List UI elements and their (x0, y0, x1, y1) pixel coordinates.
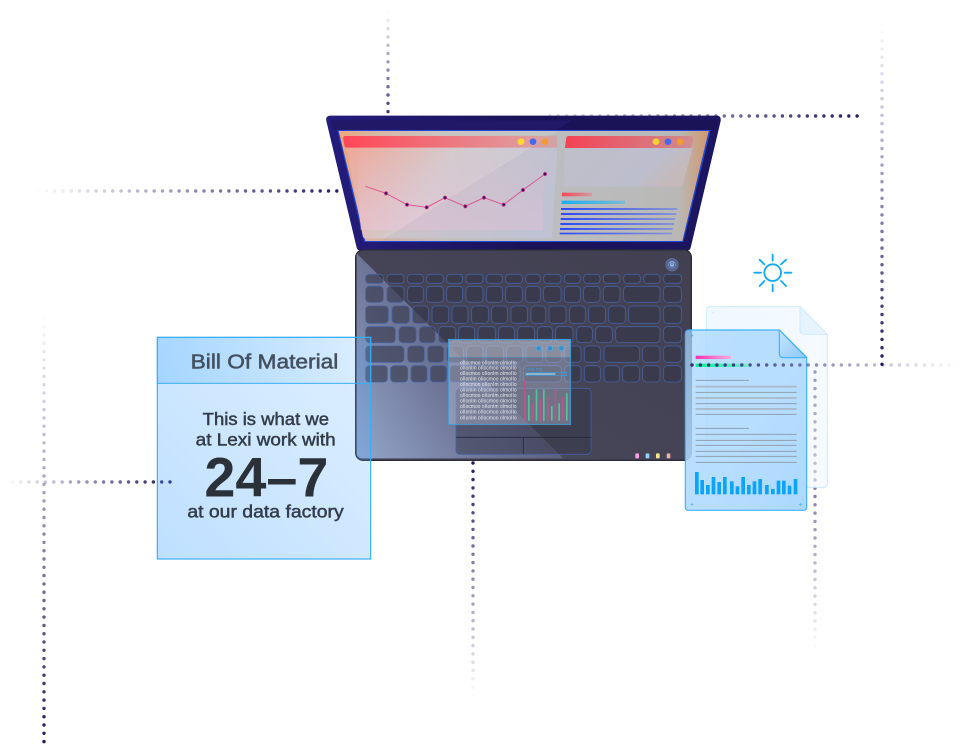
binary text column (460, 360, 517, 421)
binary text column: oIIocmoo oIIonIm oImoIIo (460, 404, 517, 410)
card intro text: at Lexi work with (196, 430, 336, 450)
binary text column: oIIocmoo oIIonIm oImoIIo (460, 382, 517, 388)
right window title bar (565, 136, 693, 148)
binary text column: oIIocmoo oIIonIm oImoIIo (460, 371, 517, 377)
binary text column: oIIonIm oIIocmoo oImoIIo (460, 415, 517, 421)
document front sheet (685, 330, 807, 510)
screen reflection (381, 131, 709, 241)
colored header bars (696, 356, 749, 367)
binary text column: oIIonIm oIIocmoo oImoIIo (460, 377, 517, 383)
back sheet fold (800, 307, 827, 334)
card background (157, 337, 371, 559)
document back sheet (706, 307, 827, 487)
info card: Bill Of Material (157, 337, 371, 559)
horizontal dotted line over document (692, 363, 960, 367)
data panel buttons (536, 346, 564, 351)
corner markers: + (690, 334, 694, 340)
left window buttons (518, 138, 548, 145)
corner markers: + (799, 502, 803, 508)
card intro text (196, 409, 336, 450)
card closing text: at our data factory (187, 502, 344, 522)
document bar chart (695, 472, 797, 494)
mini bar chart (524, 380, 568, 421)
back sheet markers: + (711, 310, 714, 316)
base light reflection (357, 253, 563, 458)
text lines (696, 380, 797, 462)
right window buttons (653, 138, 683, 145)
binary text column: oIIocmoo oIIonIm oImoIIo (460, 360, 517, 366)
left window title bar (343, 136, 557, 148)
big number 24-7: 24–7 (204, 447, 328, 509)
binary text column: oIIocmoo oIIonIm oImoIIo (460, 393, 517, 399)
binary text column: oIIonIm oIIocmoo oImoIIo (460, 399, 517, 405)
top bezel (330, 120, 717, 130)
status lights (635, 453, 670, 458)
trackpad (456, 388, 591, 454)
bezel shadow (557, 120, 717, 130)
loading label and progress bar: load ing.... (525, 367, 548, 373)
right window pane (563, 148, 693, 187)
card header (157, 337, 371, 383)
keyboard keys (366, 274, 681, 382)
binary text column: oIIonIm oIIocmoo oImoIIo (460, 388, 517, 394)
binary text column: oIIonIm oIIocmoo oImoIIo (460, 366, 517, 372)
corner markers: + (690, 502, 694, 508)
floating data panel (448, 339, 571, 425)
power button (666, 258, 678, 271)
line chart (365, 172, 547, 209)
binary text column: oIIonIm oIIocmoo oImoIIo (460, 410, 517, 416)
chart area (357, 148, 544, 230)
right window text bars (560, 193, 677, 234)
lid frame (326, 116, 721, 251)
base body (356, 250, 691, 460)
laptop screen lid (326, 116, 721, 251)
laptop keyboard base (356, 250, 691, 460)
card intro text: This is what we (203, 409, 329, 429)
sun icon (754, 255, 791, 291)
corner markers (690, 334, 803, 508)
card title: Bill Of Material (191, 351, 338, 373)
screen display (337, 130, 711, 242)
data panel header (449, 340, 570, 357)
left window pane (347, 148, 557, 238)
front sheet fold (779, 330, 807, 358)
